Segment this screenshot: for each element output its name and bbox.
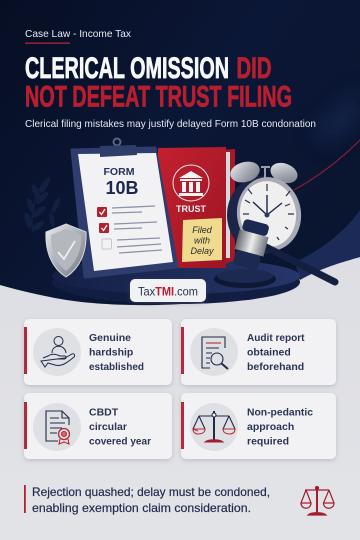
conclusion text: enabling exemption claim consideration. (32, 501, 251, 515)
card text: beforehand (247, 361, 304, 373)
title: DID (236, 52, 272, 85)
gavel (214, 218, 335, 288)
podium (52, 258, 300, 304)
card text (89, 332, 144, 373)
folder: trust (158, 147, 235, 268)
sticky note: with (194, 236, 210, 246)
icon: bank (173, 165, 209, 201)
clipboard: 10B (106, 178, 138, 198)
bells (228, 158, 262, 186)
card text: obtained (247, 346, 291, 358)
card text: CBDT (89, 406, 119, 418)
conclusion text (32, 485, 270, 515)
sticky note (182, 218, 222, 262)
card: genuine hardship (24, 319, 172, 385)
icon: report with magnifier (202, 337, 228, 369)
logo pill (130, 279, 206, 302)
title: CLERICAL OMISSION (25, 52, 229, 85)
clock ticks (243, 184, 294, 240)
card text: Genuine (89, 332, 131, 344)
card text: hardship (89, 346, 133, 358)
icon: laurel (23, 176, 62, 232)
title (25, 52, 292, 114)
conclusion text: Rejection quashed; delay must be condoned, (32, 485, 270, 499)
card text: established (89, 361, 144, 373)
card: cbdt circular (24, 393, 172, 459)
subtitle: Clerical filing mistakes may justify delayed Form 10B condonation (25, 119, 316, 130)
icon: certificate (46, 411, 70, 444)
kicker underline (25, 42, 70, 44)
card text: covered year (89, 436, 151, 448)
card text: circular (89, 421, 127, 433)
card text (89, 406, 151, 448)
sticky note: Delay (190, 246, 214, 256)
card text: required (247, 436, 289, 448)
card: audit report (181, 319, 336, 385)
clock (227, 158, 306, 255)
icon: scales (193, 411, 235, 442)
red accent line (294, 140, 360, 190)
sticky note: Filed (192, 225, 213, 235)
icon: hand with person (41, 336, 75, 367)
form title: FORM (104, 166, 135, 178)
conclusion (24, 485, 270, 515)
card text (247, 332, 305, 373)
icon: shield (46, 224, 86, 277)
card text: approach (247, 421, 294, 433)
clipboard (72, 138, 177, 277)
card: non-pedantic (181, 393, 336, 459)
card text: Audit report (247, 332, 305, 344)
checklist (97, 206, 162, 253)
logo pill: TaxTMI.com (138, 284, 198, 298)
icon: red scales (301, 486, 334, 515)
card text (247, 406, 313, 448)
kicker label: Case Law - Income Tax (25, 28, 132, 40)
header (25, 28, 316, 130)
folder label: TRUST (176, 204, 206, 215)
clock hands (253, 195, 282, 215)
card text: Non-pedantic (247, 406, 313, 418)
clip (114, 138, 120, 146)
